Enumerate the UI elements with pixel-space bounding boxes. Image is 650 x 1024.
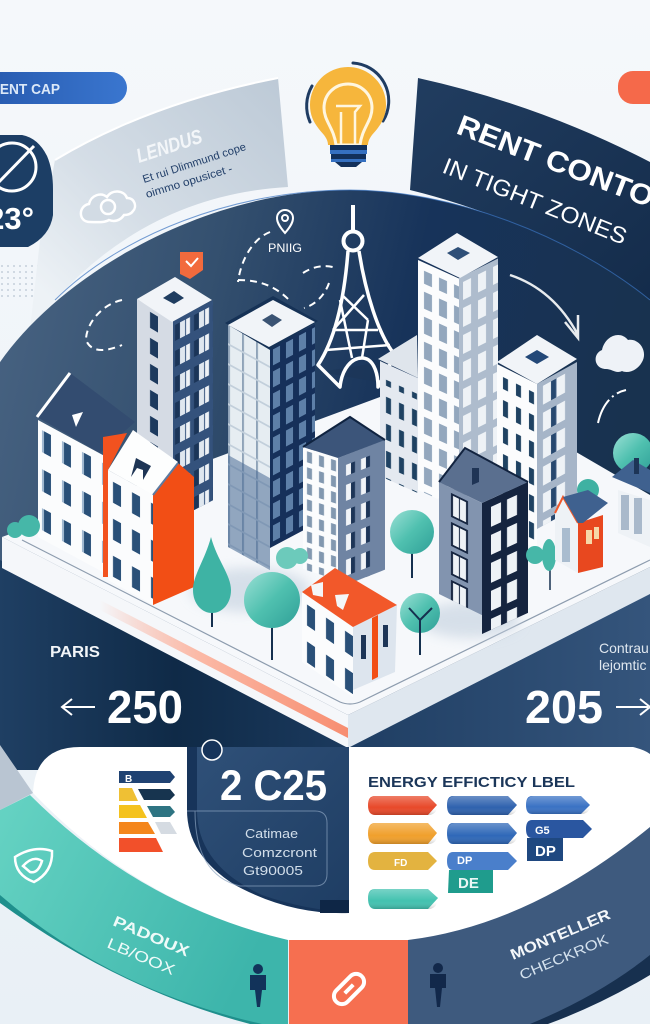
number: year: 2 C25 [220, 762, 327, 810]
grey wedge: lower left [0, 745, 33, 810]
arrow column three [526, 796, 592, 861]
rim [530, 955, 650, 1024]
building: small back block [378, 335, 418, 493]
title: rent control: RENT CONTO [452, 110, 650, 214]
building: dark front block [439, 448, 528, 634]
subtitle: in tight zones: IN TIGHT ZONES [439, 153, 631, 249]
number: 205: 205 [525, 681, 603, 733]
chart: energy ladder [119, 771, 177, 852]
heading: energy label: ENERGY EFFICTICY LBEL [368, 774, 575, 791]
chart: energy label arrows [368, 796, 592, 909]
panel: navy year card [187, 740, 349, 913]
box: caption [187, 811, 327, 886]
arrows: dashed paths [86, 232, 336, 350]
box: caption: Gt90005 [243, 863, 303, 878]
arrow: curved right [510, 275, 578, 338]
band: teal dark rim [0, 890, 288, 1024]
arrow column one: FD [394, 858, 407, 869]
isometric city platform [2, 233, 650, 748]
house one [37, 373, 135, 577]
icon: shield [15, 849, 52, 882]
icon: person [250, 964, 266, 1007]
houses: left pair [37, 373, 194, 605]
building: right tower [497, 335, 577, 549]
dotted texture [0, 265, 48, 301]
icon: white cloud [596, 335, 644, 372]
tree: teardrop [193, 537, 231, 627]
icon: person [430, 963, 446, 1007]
building: glass tower [225, 296, 318, 570]
arrow column two [447, 796, 517, 893]
panel: teal sector [0, 795, 288, 1024]
building: mid block [303, 417, 385, 588]
panel: dark central disc [0, 190, 650, 770]
diagram: Eiffel tower [318, 205, 395, 387]
tree: Y shape [400, 593, 440, 655]
text: pin label: PNIIG [268, 241, 302, 255]
icon: lightbulb [307, 63, 389, 167]
bush: left [7, 515, 40, 538]
icon: orange tag [180, 252, 203, 279]
text: teal label two: LB/OOX [104, 935, 177, 979]
house: small right [555, 479, 608, 573]
icon: cloud outline [81, 191, 135, 222]
number: 250: 250 [107, 681, 183, 733]
heading: lenders: LENDUS [134, 126, 206, 168]
arrow: left [62, 699, 95, 715]
tree: round [244, 572, 300, 660]
bush: right [526, 539, 556, 590]
text: teal label one: PADOUX [110, 913, 192, 960]
arrow column two: DE [458, 875, 479, 892]
panel: slate sector [408, 827, 650, 1024]
tree: round right [390, 510, 434, 578]
bar sheen [368, 796, 590, 909]
icon: link [331, 971, 367, 1007]
house: far right [612, 433, 650, 547]
icon: map pin [277, 210, 293, 233]
trees and bushes [7, 510, 556, 660]
platform left face [2, 537, 348, 748]
arrow: small arc [598, 390, 626, 423]
text: slate label two: CHECKROK [517, 931, 611, 983]
text: lenders line two: oimmo opusicet - [144, 163, 234, 201]
panel: coral sector [289, 940, 408, 1024]
panel: title sector [410, 78, 650, 300]
text: right caption: Contrau [599, 640, 649, 656]
arrow: right [616, 699, 650, 715]
house: red roof [302, 568, 397, 697]
platform top surface [2, 374, 650, 715]
text: right caption: lejomtic [599, 657, 646, 673]
text: right caption [599, 640, 649, 673]
icon: no symbol [0, 143, 36, 191]
decor: circle marker [202, 740, 222, 760]
text: Paris: PARIS [50, 644, 100, 661]
building: tall white tower [418, 233, 498, 508]
label pill: orange [618, 71, 650, 104]
bush: mid [276, 547, 308, 569]
under platform shade left [0, 560, 350, 770]
platform right face [348, 567, 650, 748]
building: grey navy tower [137, 277, 213, 521]
panel: grey lenders sector [30, 78, 288, 330]
arrow column three: DP [535, 843, 556, 860]
badge: 23 degrees [0, 135, 53, 247]
chart: energy ladder: B [125, 774, 132, 785]
text: slate label one: MONTELLER [508, 906, 613, 964]
box: caption: Catimae [245, 826, 298, 841]
arrow column three: G5 [535, 825, 550, 837]
text: lenders line one: Et rui Dlimmund cope [141, 141, 248, 186]
arrow column one [368, 796, 438, 909]
label pill: rent cap [0, 72, 127, 104]
panel: white energy panel [33, 747, 650, 940]
under platform shade right [350, 580, 650, 770]
house two [108, 430, 194, 605]
arrow column two: DP [457, 855, 472, 867]
box: caption: Comzcront [242, 845, 317, 860]
